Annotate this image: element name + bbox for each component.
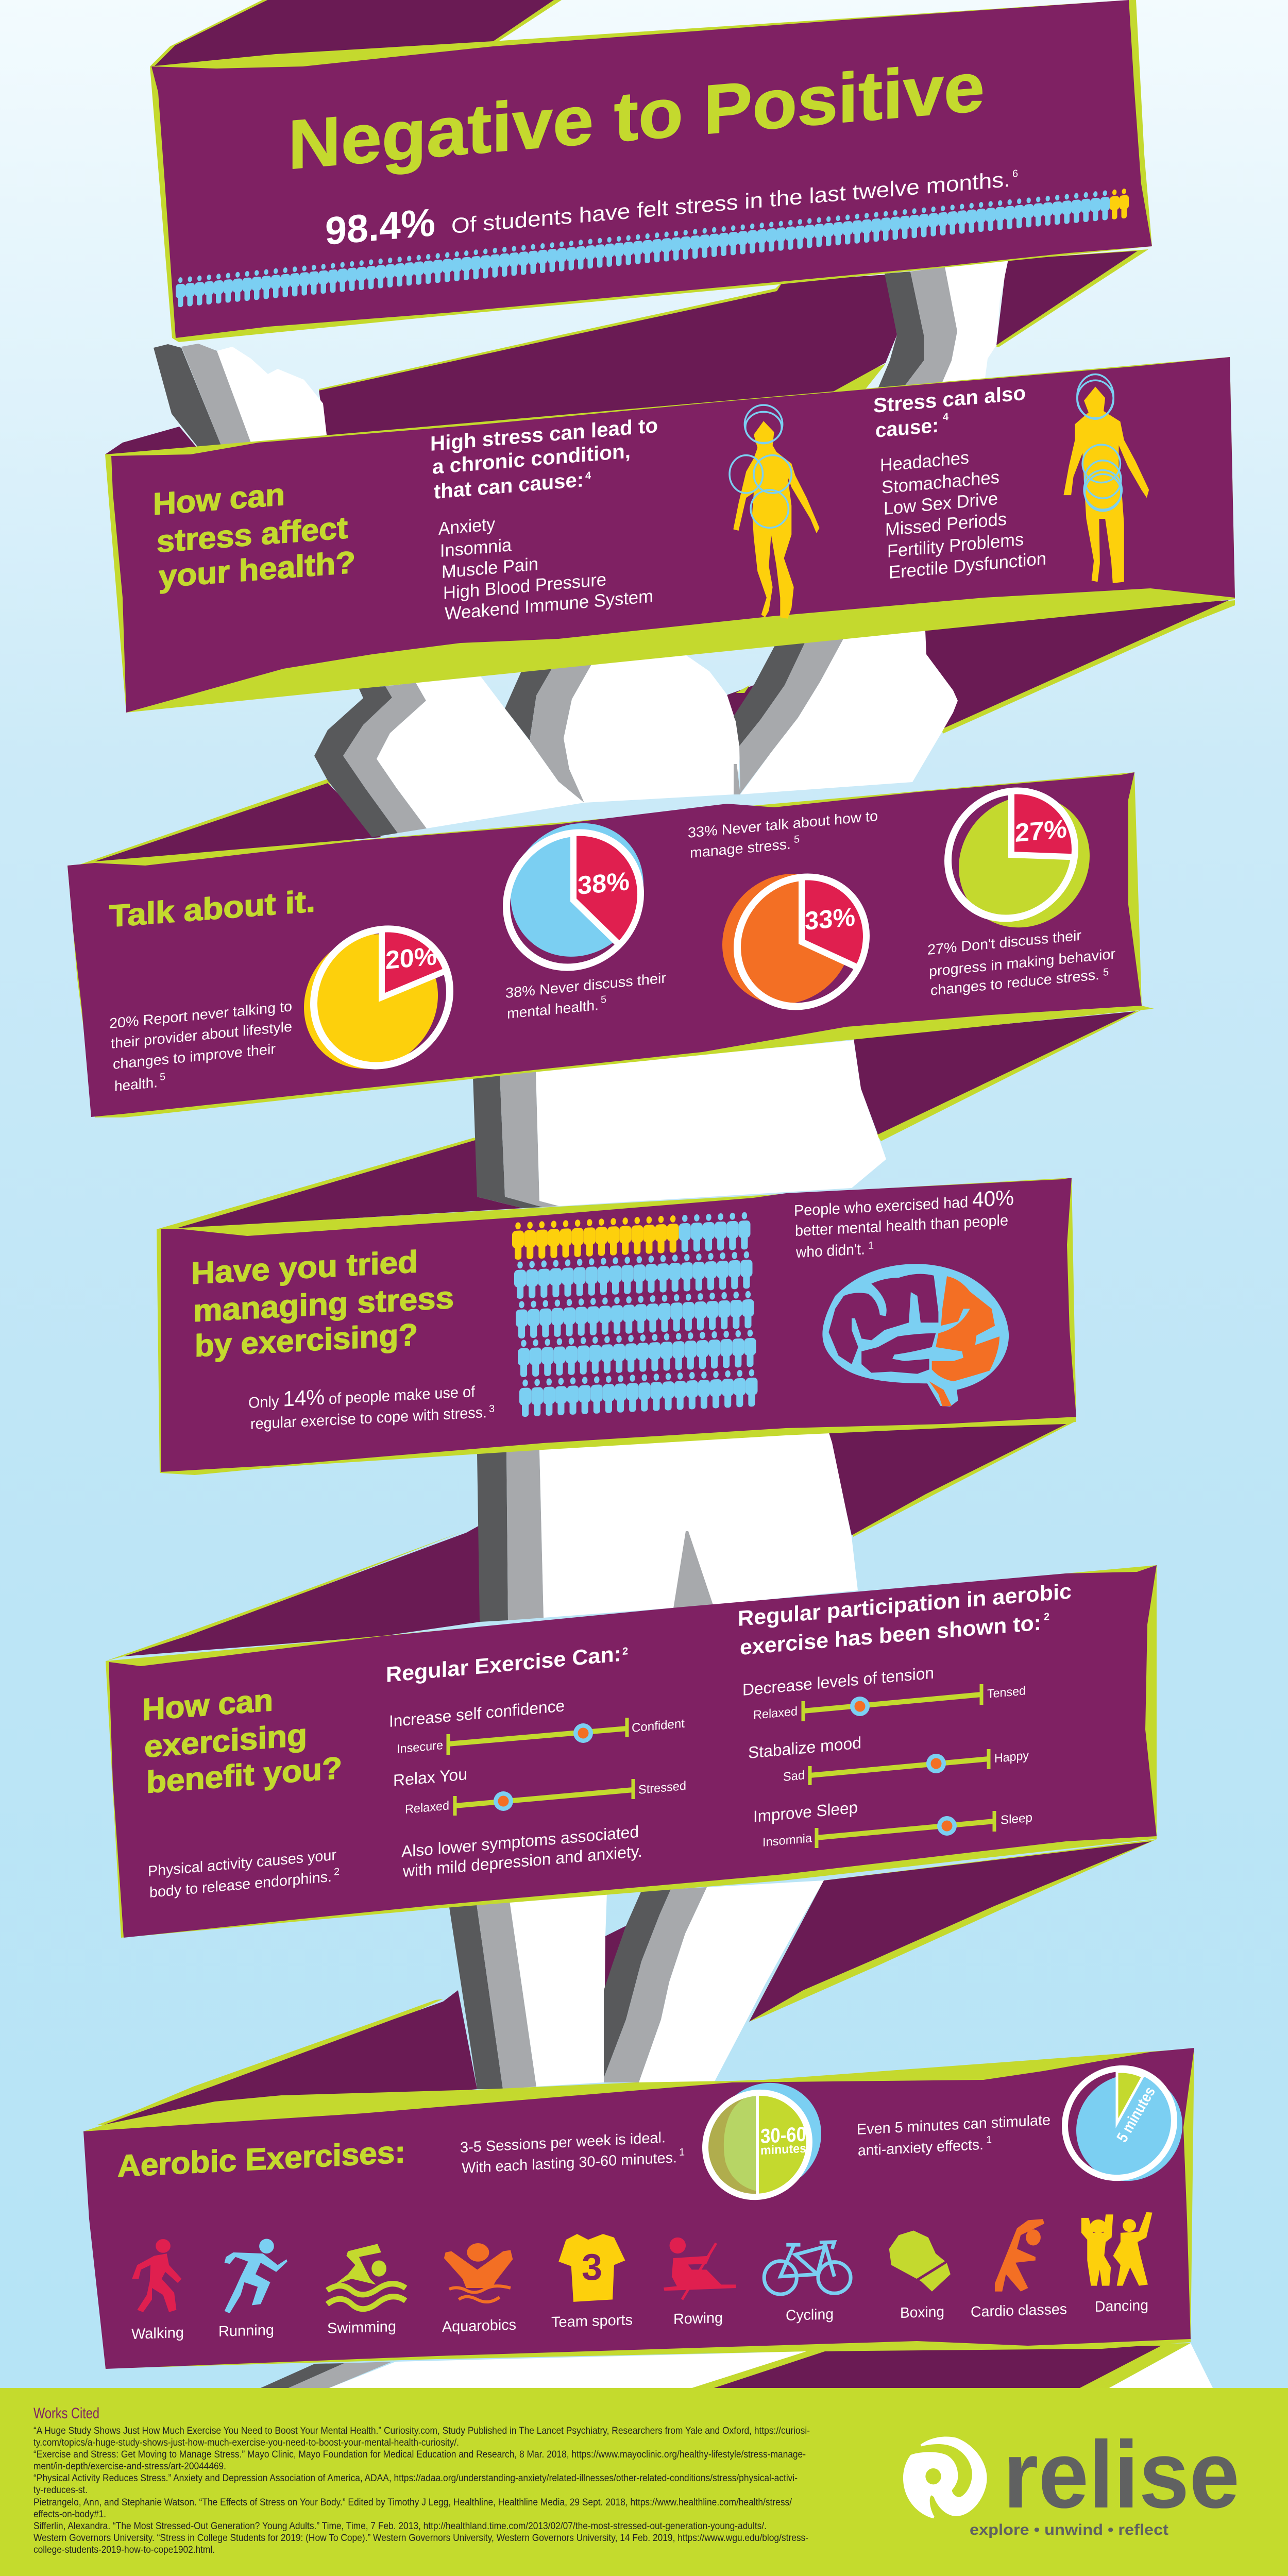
slider: sleep: Insomnia	[762, 1831, 812, 1850]
text: five minutes	[857, 2112, 1050, 2159]
label: 20% value: 20%	[385, 941, 437, 975]
icon: aquarobics	[444, 2243, 513, 2302]
caption: 27%: 5	[1103, 967, 1109, 978]
list: chronic conditions: Insomnia	[440, 535, 512, 561]
works cited list: “A Huge Study Shows Just How Much Exercise You Need to Boost Your Mental Health.” Curiosity.com, Study Published in The Lancet Psychiatry, Researchers from Yale and Oxford, https://curiosi-	[33, 2426, 810, 2436]
panel: how can exercising benefit you	[106, 1565, 1157, 1938]
text: lower symptoms: with mild depression and anxiety.	[402, 1842, 642, 1880]
activity labels: Walking	[131, 2325, 184, 2343]
works cited list: ty.com/topics/a-huge-study-shows-just-how-much-exercise-you-need-to-boost-your-mental-health-curiosity/.	[33, 2437, 459, 2448]
text: five minutes: 1	[986, 2134, 992, 2146]
panel: talk about it	[67, 772, 1154, 1117]
subheading: chronic condition	[430, 414, 658, 503]
list: chronic conditions	[438, 514, 653, 624]
pictogram: 14 of 100 people	[512, 1212, 757, 1417]
text: five minutes: anti-anxiety effects.	[858, 2137, 984, 2159]
label: minutes: minutes	[760, 2142, 806, 2158]
caption: 20%	[109, 998, 292, 1094]
subheading: chronic condition: 4	[585, 470, 591, 482]
works cited list: Western Governors University. “Stress in College Students for 2019: (How To Cope).” Western Governors University, Western Governors University, 14 Feb. 2019, https://www.wgu.edu/blog/stress-	[33, 2533, 808, 2544]
slider: self confidence	[389, 1696, 685, 1756]
works cited list: ty-reduces-st.	[33, 2485, 88, 2496]
subheading: aerobic participation: Regular participation in aerobic	[738, 1579, 1072, 1631]
icon: cycling	[764, 2242, 851, 2294]
icon: dancing	[1081, 2212, 1153, 2286]
caption: 20%: 20% Report never talking to	[109, 998, 292, 1031]
panel: managing stress by exercising	[157, 1178, 1076, 1475]
caption: 27%: changes to reduce stress.	[930, 967, 1099, 998]
label: 30-60: 30-60	[760, 2123, 806, 2148]
slider: self confidence: Insecure	[397, 1738, 443, 1756]
text: sessions per week: 1	[679, 2146, 685, 2158]
subheading: chronic condition: High stress can lead to	[430, 414, 658, 455]
list: other effects: Stomachaches	[882, 467, 999, 498]
works cited list: “Exercise and Stress: Get Moving to Manage Stress.” Mayo Clinic, Mayo Foundation for Medical Education and Research, 8 Mar. 2018, https://www.mayoclinic.org/healthy-lifestyle/stress-manage-	[33, 2449, 806, 2460]
panel: aerobic exercises	[83, 2048, 1194, 2369]
heading: by exercising?	[195, 1317, 418, 1363]
text: sessions per week: With each lasting 30-60 minutes.	[462, 2149, 677, 2177]
heading: Aerobic Exercises:	[117, 2134, 405, 2183]
heading: benefit you?	[146, 1751, 342, 1800]
subheading: stress can also cause: 4	[943, 411, 949, 423]
icon: cardio classes	[995, 2219, 1044, 2292]
caption: 27%: 27% Don't discuss their	[927, 927, 1081, 958]
caption: 38%: 38% Never discuss their	[505, 970, 666, 1001]
activity labels: Rowing	[673, 2310, 723, 2328]
logo mark	[903, 2436, 987, 2518]
stat: 98.4%: 98.4%	[325, 200, 435, 253]
heading: exercising	[144, 1717, 307, 1764]
heading	[191, 1244, 454, 1363]
text: sessions per week: 3-5 Sessions per week is ideal.	[460, 2129, 666, 2156]
text: 40% better mental health: who didn't.	[795, 1241, 865, 1261]
caption: 20%: changes to improve their	[113, 1041, 276, 1072]
text: 40% better mental health: 1	[868, 1240, 874, 1251]
text: lower symptoms: Also lower symptoms associated	[401, 1822, 639, 1861]
caption: 27%: progress in making behavior	[929, 946, 1115, 979]
activity labels: Team sports	[551, 2312, 633, 2331]
slider: mood: Sad	[783, 1768, 805, 1784]
text: coping with stress: regular exercise to cope with stress.	[250, 1404, 487, 1433]
slider: tension: Relaxed	[753, 1704, 798, 1722]
subheading: aerobic participation: exercise has been shown to:	[740, 1611, 1041, 1659]
footer band	[0, 2388, 1288, 2576]
text: only 14%: Only 14% of people make use of	[248, 1377, 476, 1413]
label: 38% value: 38%	[578, 867, 630, 900]
activity labels	[131, 2297, 1148, 2343]
slider: mood: Happy	[994, 1749, 1029, 1766]
logo wordmark: relise	[1003, 2422, 1240, 2528]
pie chart: 5 minutes	[1065, 2065, 1182, 2184]
icon: team sports jersey	[558, 2234, 625, 2302]
works cited list: Pietrangelo, Ann, and Stephanie Watson. “The Effects of Stress on Your Body.” Edited by Timothy J Legg, Healthline, Healthline Media, 29 Sept. 2018, https://www.healthline.com/health/stress/	[33, 2497, 792, 2508]
icon: brain	[822, 1264, 1009, 1406]
heading: How can	[142, 1683, 273, 1727]
text: 40% better mental health	[794, 1185, 1014, 1261]
label: 27% value: 27%	[1015, 814, 1067, 848]
works cited list: effects-on-body#1.	[33, 2509, 106, 2520]
caption: 38%: mental health.	[507, 997, 599, 1022]
subheading: stress can also cause: cause:	[875, 414, 939, 442]
works cited list: ment/in-depth/exercise-and-stress/art-20044469.	[33, 2461, 226, 2472]
icon: running	[225, 2239, 287, 2313]
subheading: regular exercise can: Regular Exercise Can:	[386, 1641, 621, 1687]
slider: tension: Tensed	[987, 1684, 1026, 1701]
caption: 27%	[927, 927, 1115, 998]
subheading: chronic condition: that can cause:	[434, 468, 584, 503]
caption: 33%: 33% Never talk about how to	[688, 808, 878, 841]
list: other effects: Fertility Problems	[887, 529, 1024, 562]
pie chart: 38%	[506, 818, 643, 973]
works cited list: Sifferlin, Alexandra. “The Most Stressed-Out Generation? Young Adults.” Time, Time, 7 Feb. 2013, http://healthland.time.com/2013/02/07/the-most-stressed-out-generation-young-adults/.	[33, 2521, 767, 2532]
stat description: Of students have felt stress in the last twelve months.	[451, 167, 1010, 238]
subheading: regular exercise can: 2	[622, 1646, 628, 1657]
panel: how can stress affect your health	[105, 357, 1235, 713]
slider: tension	[742, 1664, 1026, 1722]
pie chart: 27%	[948, 784, 1090, 934]
jersey number: 3	[582, 2247, 602, 2288]
slider: tension: Decrease levels of tension	[742, 1664, 934, 1699]
list: chronic conditions: High Blood Pressure	[443, 569, 606, 603]
list: chronic conditions: Anxiety	[438, 514, 495, 539]
text: endorphins	[148, 1847, 340, 1901]
heading: Have you tried	[191, 1244, 418, 1291]
heading: managing stress	[193, 1280, 454, 1328]
slider: self confidence: Confident	[632, 1717, 685, 1735]
activity labels: Cycling	[786, 2306, 834, 2324]
activity labels: Dancing	[1095, 2297, 1148, 2315]
figure: white silhouette with grey extrusion	[154, 260, 1213, 2388]
list: other effects: Low Sex Drive	[884, 488, 998, 519]
pie chart: 33%	[722, 867, 866, 1013]
panel: title banner	[150, 0, 1152, 342]
activity labels: Running	[218, 2322, 274, 2340]
heading: How can	[153, 477, 285, 521]
slider: sleep	[753, 1798, 1032, 1850]
list: other effects: Headaches	[880, 447, 969, 476]
icon: walking	[132, 2239, 181, 2312]
icon row: aerobic activities	[132, 2212, 1153, 2313]
caption: 33%: manage stress.	[690, 836, 791, 861]
heading: stress affect	[157, 510, 348, 559]
footnote 6: 6	[1012, 168, 1018, 180]
slider: mood	[748, 1733, 1029, 1785]
slider: relax you: Relaxed	[405, 1799, 449, 1817]
list: chronic conditions: Muscle Pain	[442, 554, 538, 582]
activity labels: Cardio classes	[971, 2301, 1067, 2320]
activity labels: Boxing	[900, 2303, 944, 2321]
subheading: stress can also cause	[873, 382, 1026, 442]
caption: 33%: 5	[794, 834, 800, 845]
slider: sleep: Sleep	[1001, 1810, 1032, 1827]
icon: swimming	[327, 2244, 405, 2309]
heading	[142, 1683, 342, 1800]
caption: 20%: 5	[160, 1071, 165, 1083]
caption: 38%: 5	[601, 994, 606, 1006]
text: lower symptoms	[401, 1822, 642, 1880]
caption: 20%: health.	[114, 1074, 158, 1094]
list: other effects: Missed Periods	[885, 509, 1007, 540]
label: 33% value: 33%	[805, 902, 855, 936]
slider: self confidence: Increase self confidence	[389, 1696, 565, 1731]
label: 5 minutes: 5 minutes	[1113, 2084, 1159, 2145]
subheading: aerobic participation: 2	[1044, 1611, 1049, 1623]
slider: relax you: Relax You	[393, 1765, 467, 1790]
works cited heading: Works Cited	[33, 2405, 99, 2422]
title: Negative to Positive	[288, 47, 985, 184]
text: 40% better mental health: People who exercised had 40%	[794, 1185, 1014, 1221]
works cited list	[33, 2426, 810, 2555]
list: other effects	[880, 447, 1046, 583]
icon: body with stress rings, left	[730, 405, 820, 619]
heading: Talk about it.	[109, 884, 315, 934]
caption: 38%	[505, 970, 666, 1022]
slider: relax you: Stressed	[638, 1779, 686, 1797]
pictogram: 100 students	[176, 188, 1129, 308]
text: endorphins: 2	[334, 1866, 340, 1878]
list: other effects: Erectile Dysfunction	[889, 549, 1046, 583]
slider: mood: Stabalize mood	[748, 1733, 861, 1762]
text: endorphins: body to release endorphins.	[149, 1869, 332, 1901]
slider: sleep: Improve Sleep	[753, 1798, 858, 1826]
works cited list: “Physical Activity Reduces Stress.” Anxiety and Depression Association of America, ADAA, https://adaa.org/understanding-anxiety/related-illnesses/other-related-conditions/stress/physical-activi-	[33, 2473, 798, 2484]
heading: your health?	[159, 545, 355, 594]
subheading: stress can also cause: Stress can also	[873, 382, 1026, 417]
caption: 33%	[688, 808, 878, 861]
text: sessions per week	[460, 2129, 685, 2177]
logo tagline: explore • unwind • reflect	[970, 2521, 1168, 2538]
text: endorphins: Physical activity causes your	[148, 1847, 336, 1880]
heading	[153, 477, 355, 594]
icon: rowing	[664, 2238, 736, 2299]
text: five minutes: Even 5 minutes can stimulate	[857, 2112, 1050, 2138]
slider: relax you	[393, 1765, 686, 1817]
pie chart: 20%	[304, 923, 450, 1075]
list: chronic conditions: Weakend Immune System	[445, 586, 653, 624]
subheading: aerobic participation	[738, 1579, 1072, 1659]
activity labels: Swimming	[327, 2318, 396, 2337]
pie chart: 30-60 minutes	[705, 2080, 821, 2199]
caption: 20%: their provider about lifestyle	[111, 1019, 292, 1052]
footnote 3: 3	[489, 1403, 495, 1415]
subheading: chronic condition: a chronic condition,	[432, 439, 631, 479]
activity labels: Aquarobics	[442, 2317, 516, 2335]
text: 40% better mental health: better mental health than people	[795, 1212, 1008, 1240]
icon: boxing glove	[889, 2230, 951, 2292]
icon: body with stress rings, right	[1063, 374, 1149, 583]
works cited list: college-students-2019-how-to-cope1902.html.	[33, 2545, 215, 2555]
